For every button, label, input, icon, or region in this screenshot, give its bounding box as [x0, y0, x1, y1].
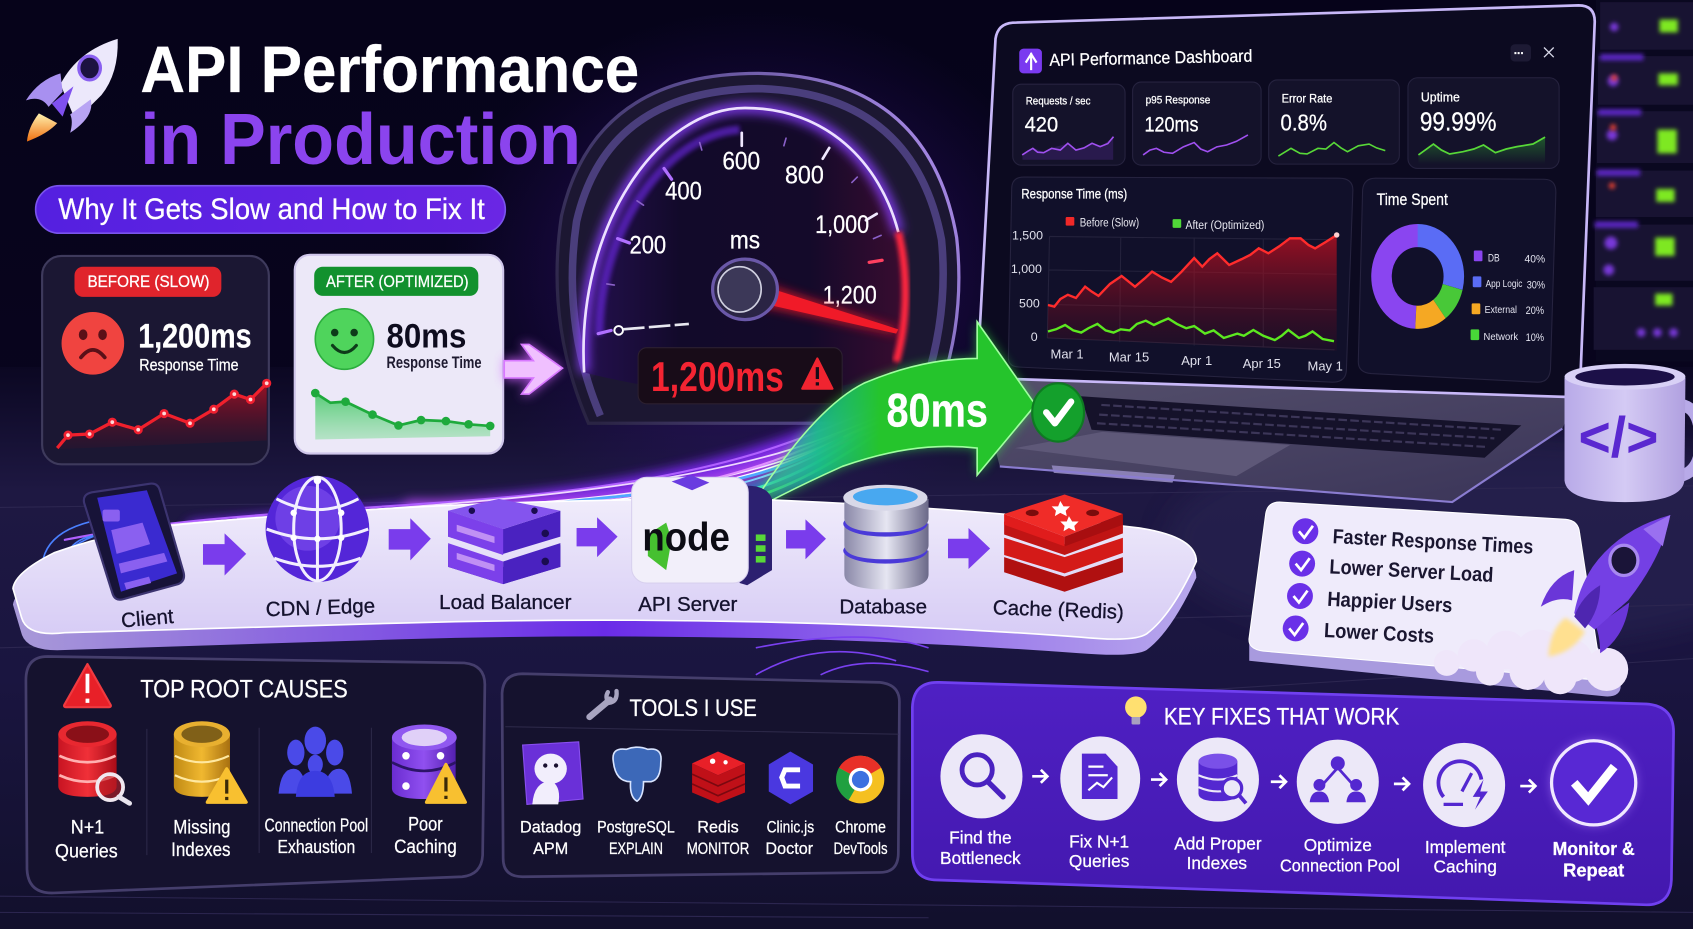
arrow: step 3 — [1271, 775, 1286, 788]
arrow: before to gauge — [504, 343, 563, 395]
badge: after: AFTER (OPTIMIZED) — [326, 273, 469, 291]
benefit: lower costs — [1283, 615, 1435, 648]
cause: n+1 queries: N+1 — [71, 817, 104, 839]
node: database: Database — [839, 595, 927, 618]
stat card: uptime — [1408, 78, 1559, 168]
step: optimize connection pool: Optimize — [1304, 835, 1372, 855]
metric: after: Response Time — [387, 354, 482, 372]
tool: postgresql: PostgreSQL — [597, 818, 675, 836]
tool: redis — [687, 751, 749, 858]
metric: before: Response Time — [139, 356, 239, 374]
icon: green check — [1032, 383, 1084, 442]
gauge scale labels: 400 — [665, 179, 702, 206]
cause: connection pool exhaustion: Connection Pool — [265, 814, 368, 835]
digital readout — [638, 348, 842, 404]
icon: lightbulb — [1125, 696, 1147, 724]
stat card: error rate — [1269, 80, 1399, 164]
gauge outer ring — [572, 89, 943, 416]
metric: before: 1,200ms — [138, 318, 252, 356]
gauge scale labels: 1,000 — [815, 212, 869, 239]
tool: clinic.js — [765, 751, 814, 858]
step: fix n+1 queries — [1060, 736, 1140, 871]
card: after (optimized) — [295, 255, 503, 453]
node: load balancer — [439, 499, 572, 614]
tool: datadog: APM — [533, 840, 568, 858]
stat card: uptime: Uptime — [1421, 89, 1460, 104]
tool: redis: Redis — [697, 818, 739, 836]
node: client: Client — [120, 605, 175, 632]
icon: smiley face — [315, 309, 374, 369]
arrow: step 5 — [1520, 780, 1535, 793]
tool: postgresql — [597, 747, 675, 858]
heading: TOOLS I USE — [629, 695, 757, 722]
stat card: p95 response: 120ms — [1145, 112, 1199, 137]
gauge scale labels: ms — [730, 227, 760, 254]
gauge neon ring — [584, 108, 905, 373]
step: implement caching: Caching — [1433, 856, 1497, 876]
arrow: flow 3 — [577, 517, 618, 557]
stat card: error rate: 0.8% — [1281, 110, 1327, 136]
gauge scale labels: 800 — [785, 163, 824, 190]
line chart: response time: Mar 1 — [1051, 346, 1084, 361]
badge: before — [75, 267, 221, 297]
node: cache — [992, 495, 1124, 624]
icon: redis stack — [1004, 495, 1123, 592]
gauge scale labels: 200 — [629, 233, 666, 260]
step: monitor and repeat: Monitor & — [1553, 838, 1635, 859]
tool: clinic.js: Clinic.js — [767, 818, 814, 836]
gauge scale labels — [629, 149, 877, 309]
arrow: 80ms — [745, 322, 1035, 516]
tool: datadog: Datadog — [520, 818, 581, 836]
icon: servers — [448, 499, 560, 584]
cause: n+1 queries — [55, 721, 130, 862]
cause: missing indexes — [171, 721, 246, 861]
step: implement caching: Implement — [1425, 837, 1506, 857]
panel: key fixes that work — [912, 682, 1674, 905]
architecture platform — [13, 499, 1196, 675]
metric: after — [387, 318, 482, 372]
line chart: response time: Apr 15 — [1243, 356, 1281, 371]
line chart: response time: Apr 1 — [1181, 353, 1212, 368]
node: database — [839, 485, 929, 618]
donut chart: time spent — [1358, 178, 1556, 382]
metric: after: 80ms — [387, 318, 466, 356]
node: API server: API Server — [638, 593, 738, 616]
heading: KEY FIXES THAT WORK — [1164, 703, 1399, 730]
arrow: 80ms: 80ms — [886, 384, 988, 437]
cause: poor caching — [392, 724, 465, 858]
donut chart: time spent: Time Spent — [1377, 191, 1448, 209]
line chart: response time: May 1 — [1308, 358, 1343, 373]
exclamation mark — [86, 674, 89, 703]
illustration: rocket and clouds — [1434, 515, 1670, 694]
digital readout: 1,200ms — [651, 353, 784, 400]
line chart: response time: Mar 15 — [1109, 350, 1149, 365]
subtitle pill: Why It Gets Slow and How to Fix It — [58, 194, 485, 226]
step: optimize connection pool: Connection Pool — [1280, 855, 1400, 875]
icon: wrench — [590, 691, 617, 717]
benefit: happier users — [1287, 583, 1453, 617]
title: in Production — [140, 100, 581, 180]
benefit: faster response times — [1292, 518, 1534, 559]
line chart: response time: After (Optimized) — [1186, 218, 1264, 232]
arrow: flow 5 — [948, 528, 990, 569]
cause: n+1 queries: Queries — [55, 840, 118, 862]
gauge ticks — [598, 133, 882, 334]
tool: chrome — [834, 756, 888, 858]
line chart: response time: 0 — [1031, 330, 1038, 344]
arrow: step 2 — [1151, 773, 1166, 786]
step: add proper indexes — [1174, 737, 1262, 873]
dashboard header: API Performance Dashboard — [1049, 46, 1253, 70]
gauge bezel — [557, 73, 959, 423]
tool: chrome: Chrome — [835, 818, 886, 836]
node: CDN edge: CDN / Edge — [265, 594, 376, 621]
speedometer gauge — [557, 73, 959, 423]
header band divider — [505, 727, 898, 734]
arrow: flow 2 — [389, 518, 431, 560]
step: fix n+1 queries: Fix N+1 — [1069, 832, 1129, 852]
node: CDN edge — [265, 476, 376, 621]
cause: poor caching: Caching — [394, 836, 457, 858]
step: add proper indexes: Indexes — [1187, 853, 1247, 873]
donut chart: time spent: 20% — [1526, 305, 1544, 317]
dashboard header: ... — [1514, 43, 1524, 57]
gauge scale labels: 600 — [722, 149, 760, 176]
chart: before — [57, 380, 270, 449]
arrow: step 1 — [1032, 770, 1047, 783]
gauge scale labels: 1,200 — [823, 282, 877, 309]
panel: tools i use — [502, 674, 899, 877]
donut chart: time spent: 40% — [1525, 253, 1545, 265]
cause: poor caching: Poor — [408, 813, 443, 835]
benefit: lower server load — [1289, 551, 1494, 587]
heading: TOP ROOT CAUSES — [140, 677, 348, 704]
step: implement caching — [1423, 743, 1506, 876]
tool: redis: MONITOR — [687, 840, 749, 858]
icon: node cube — [632, 475, 772, 585]
badge: after — [314, 267, 478, 296]
step: optimize connection pool — [1280, 740, 1400, 875]
benefit: lower server load: Lower Server Load — [1329, 555, 1494, 587]
panel: top root causes — [26, 656, 485, 893]
title rocket — [26, 39, 118, 141]
stat card: requests per second: Requests / sec — [1026, 96, 1091, 108]
coffee mug — [1565, 364, 1693, 502]
step: find the bottleneck: Find the — [949, 827, 1012, 847]
donut chart: time spent: External — [1485, 305, 1517, 316]
donut chart: time spent: App Logic — [1486, 279, 1522, 290]
panel: benefits — [1249, 502, 1621, 696]
gauge zero marker — [614, 324, 689, 335]
line chart: response time: 1,000 — [1011, 262, 1042, 276]
tool: clinic.js: Doctor — [765, 840, 814, 858]
step: monitor and repeat: Repeat — [1563, 860, 1624, 881]
donut chart: time spent: 10% — [1526, 332, 1544, 344]
gauge face — [584, 108, 907, 394]
step: find the bottleneck — [940, 734, 1022, 868]
title — [140, 32, 639, 180]
tool: chrome: DevTools — [834, 840, 888, 858]
step: add proper indexes: Add Proper — [1174, 834, 1262, 854]
tool: datadog — [520, 742, 583, 858]
laptop screen — [977, 5, 1595, 397]
dashboard header — [1019, 43, 1554, 73]
icon: sad face — [62, 312, 124, 375]
line chart: response time: Response Time (ms) — [1021, 186, 1127, 202]
icon: database — [843, 485, 929, 590]
node: cache: Cache (Redis) — [992, 596, 1124, 624]
stat card: requests per second — [1013, 84, 1125, 165]
chart: after — [311, 389, 495, 439]
stat card: p95 response — [1133, 82, 1261, 165]
icon: smartphone — [84, 484, 184, 600]
server rack — [1594, 0, 1693, 362]
badge: before: BEFORE (SLOW) — [87, 273, 209, 291]
stat card: requests per second: 420 — [1025, 112, 1058, 137]
dividers — [147, 728, 371, 855]
node: client — [84, 484, 184, 632]
icon: node cube: node — [642, 516, 730, 560]
stat card: error rate: Error Rate — [1282, 92, 1333, 106]
cause: missing indexes: Indexes — [171, 839, 231, 861]
cause: connection pool exhaustion: Exhaustion — [277, 836, 355, 857]
laptop base and keyboard — [977, 378, 1582, 502]
benefit: happier users: Happier Users — [1327, 588, 1453, 617]
donut chart: time spent: 30% — [1527, 279, 1545, 291]
benefit: faster response times: Faster Response Times — [1332, 525, 1534, 559]
metric: before — [138, 318, 252, 374]
donut chart: time spent: Network — [1484, 332, 1519, 343]
line chart: response time: 1,500 — [1012, 229, 1043, 243]
arrow: flow 1 — [203, 533, 246, 575]
icon: warning — [64, 664, 111, 707]
card: before (slow) — [42, 256, 270, 464]
step: find the bottleneck: Bottleneck — [940, 848, 1021, 868]
coffee mug: </> — [1579, 406, 1658, 469]
cause: missing indexes: Missing — [173, 817, 231, 839]
donut chart: time spent: DB — [1488, 252, 1500, 264]
line chart: response time — [1008, 177, 1353, 382]
tool: postgresql: EXPLAIN — [609, 840, 663, 858]
node: API server — [632, 475, 772, 616]
icon: globe — [266, 476, 369, 582]
stat card: p95 response: p95 Response — [1146, 95, 1210, 107]
stat card: uptime: 99.99% — [1420, 109, 1496, 137]
step: fix n+1 queries: Queries — [1069, 851, 1130, 871]
subtitle pill — [36, 186, 505, 233]
cause: connection pool exhaustion — [265, 727, 368, 857]
arrow: step 4 — [1394, 777, 1409, 790]
line chart: response time: Before (Slow) — [1080, 216, 1139, 230]
laptop — [977, 5, 1595, 502]
title: API Performance — [140, 32, 639, 106]
speed streaks — [42, 373, 977, 594]
arrow: flow 4 — [786, 519, 826, 559]
gauge needle — [713, 259, 898, 334]
step: monitor and repeat — [1552, 741, 1636, 881]
node: load balancer: Load Balancer — [439, 591, 572, 614]
line chart: response time: 500 — [1019, 297, 1040, 311]
benefit: lower costs: Lower Costs — [1323, 619, 1435, 648]
